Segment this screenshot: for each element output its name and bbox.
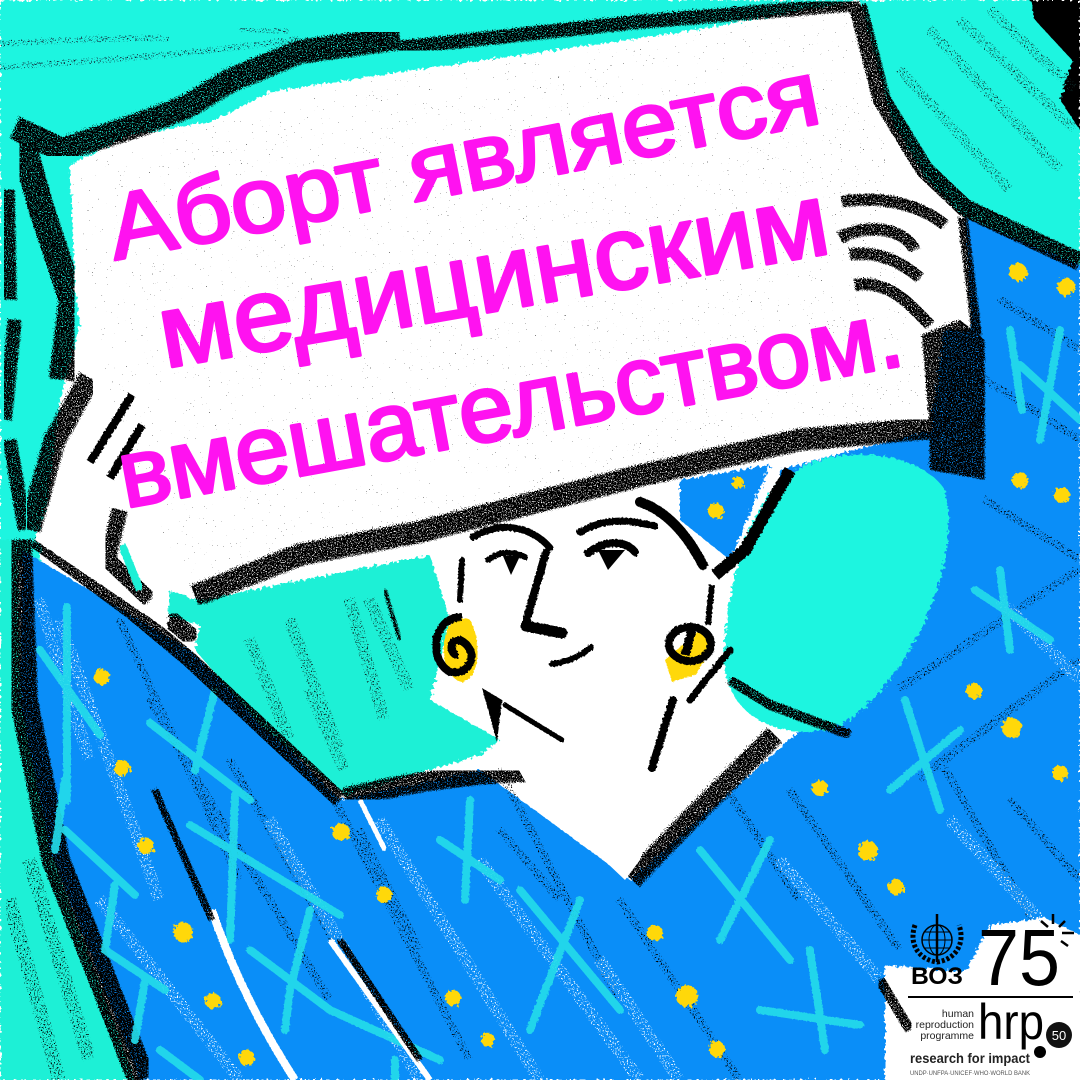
right hair: teal oval <box>632 455 949 880</box>
text: human reproduction programme: reproduction <box>916 1019 974 1031</box>
white protest sign with raised hands <box>15 4 1080 630</box>
white and black streaks on the blouse <box>155 790 430 1080</box>
slogan line 1: Аборт является <box>99 42 828 280</box>
left hand fingers <box>90 395 142 478</box>
face <box>450 502 730 880</box>
icon: 50 badge: 50 <box>1052 1028 1066 1043</box>
text: human reproduction programme: programme <box>920 1030 974 1042</box>
blouse pattern: teal crosshatch <box>40 330 1080 1080</box>
text: research for impact: research for impact <box>910 1050 1030 1066</box>
icon: WHO emblem <box>913 914 961 962</box>
sign slogan: Аборт является медицинским вмешательством. <box>99 42 911 529</box>
icon: 50 badge <box>1034 1022 1072 1058</box>
text: human reproduction programme <box>916 1008 974 1042</box>
sign speckle <box>70 10 932 600</box>
text: sponsors: UNDP·UNFPA·UNICEF·WHO·WORLD BANK <box>910 1071 1030 1077</box>
text: ВОЗ: ВОЗ <box>911 963 963 990</box>
divider rule <box>908 996 1073 998</box>
icon: sun rays <box>1041 914 1074 946</box>
background curtain: teal and black scribbles <box>0 0 1080 560</box>
logos: WHO 75 and HRP 50 <box>880 913 1080 1080</box>
text: hrp: hrp <box>978 994 1044 1050</box>
slogan line 2: медицинским <box>149 161 837 391</box>
text: human reproduction programme: human <box>942 1008 974 1020</box>
earrings <box>436 585 715 682</box>
left hair: teal mass <box>35 540 530 800</box>
slogan line 3: вмешательством. <box>109 280 911 529</box>
blouse pattern: yellow dots <box>94 263 1075 1066</box>
right wrist shadow <box>922 218 985 480</box>
right hand fingers <box>840 200 945 325</box>
text: 75: 75 <box>978 913 1060 1002</box>
